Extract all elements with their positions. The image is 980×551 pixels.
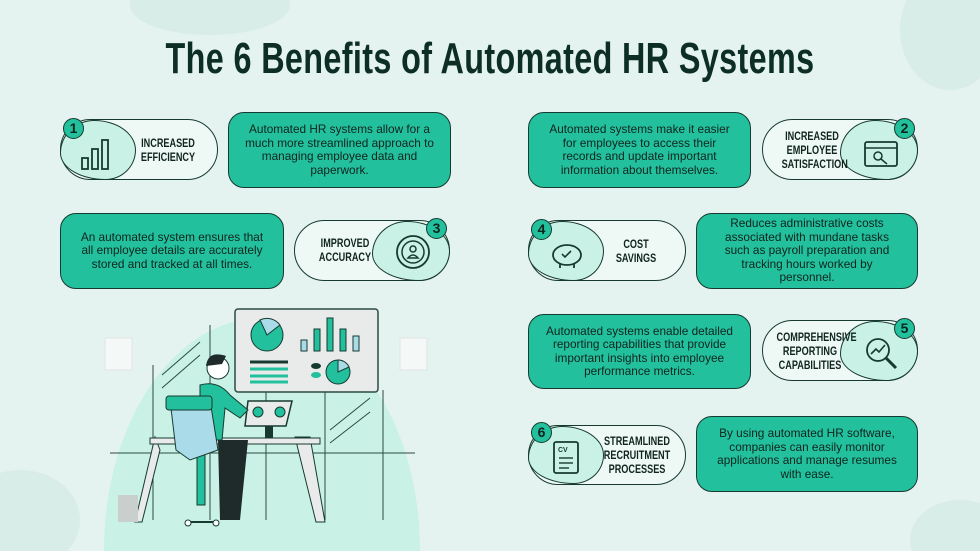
benefit 5 — [528, 314, 918, 389]
benefit 1: 1 — [70, 120, 77, 136]
icon: piggy bank — [552, 244, 582, 268]
benefit 2: INCREASED — [785, 129, 839, 143]
benefit 2: SATISFACTION — [782, 157, 848, 171]
benefit 3: An automated system ensures that all employee details are accurately stored and tracked at all times. — [81, 230, 263, 271]
benefit 5: CAPABILITIES — [779, 358, 841, 372]
benefit 6: PROCESSES — [609, 462, 665, 476]
icon: target person — [396, 235, 430, 269]
benefit 5: 5 — [901, 320, 908, 336]
benefit 6: 6 — [538, 424, 545, 440]
benefit 1: EFFICIENCY — [141, 150, 195, 164]
benefit 6: By using automated HR software, companies can easily monitor applications and manage resumes with ease. — [717, 426, 897, 480]
benefit 6: RECRUITMENT — [604, 448, 670, 462]
benefit 3: 3 — [433, 220, 440, 236]
benefit 4: 4 — [538, 221, 545, 237]
benefit 6 — [528, 416, 918, 492]
benefit 5: REPORTING — [783, 344, 837, 358]
benefit 3 — [60, 213, 450, 289]
benefit 5: Automated systems enable detailed reporting capabilities that provide important insights into employee performance metrics. — [546, 324, 733, 378]
benefit 2: 2 — [901, 120, 908, 136]
icon: CV document: CV — [558, 447, 568, 454]
benefit 1: INCREASED — [141, 136, 195, 150]
illustration: person at desk with dashboard — [104, 308, 428, 551]
icon: browser window — [864, 141, 898, 167]
benefit 4: SAVINGS — [616, 251, 656, 265]
title: The 6 Benefits of Automated HR Systems — [166, 34, 814, 83]
benefit 5: COMPREHENSIVE — [777, 330, 857, 344]
benefit 4: COST — [623, 237, 649, 251]
benefit 2: Automated systems make it easier for employees to access their records and update important information about themselves. — [549, 122, 730, 176]
benefit 4 — [528, 213, 918, 289]
benefit 1: Automated HR systems allow for a much more streamlined approach to managing employee data and paperwork. — [245, 122, 434, 176]
benefit 6: STREAMLINED — [604, 434, 670, 448]
icon: bar chart — [81, 139, 109, 170]
benefit 3: ACCURACY — [319, 250, 371, 264]
benefit 2: EMPLOYEE — [787, 143, 837, 157]
benefit 4: Reduces administrative costs associated with mundane tasks such as payroll preparation and tracking hours worked by personnel. — [725, 216, 889, 284]
benefit 2 — [528, 112, 918, 188]
icon: magnifier chart — [866, 338, 897, 369]
benefit 3: IMPROVED — [321, 236, 369, 250]
benefit 1 — [60, 112, 451, 188]
icon: CV document — [553, 441, 579, 474]
